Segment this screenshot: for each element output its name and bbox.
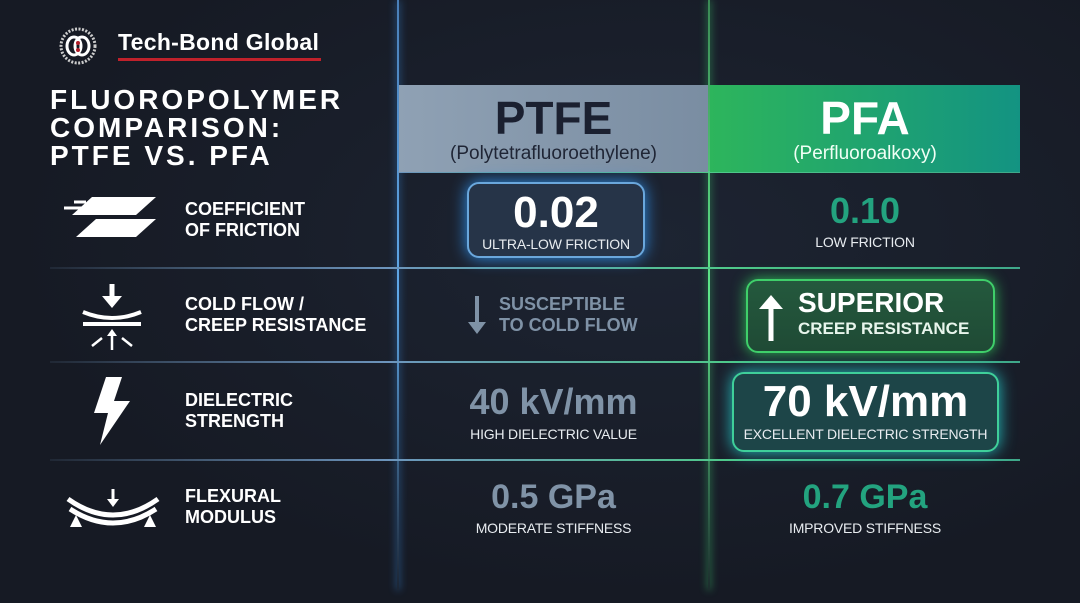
PTFE dielectric: HIGH DIELECTRIC VALUE [470,426,637,442]
row3 label: DIELECTRIC [185,390,293,410]
PFA creep box [746,279,995,353]
PFA flexural: IMPROVED STIFFNESS [789,520,941,536]
horizontal lines [50,267,1020,269]
row2 label: COLD FLOW / [185,294,304,314]
row3 label: STRENGTH [185,411,284,431]
row1 label: COEFFICIENT [185,199,305,219]
PTFE creep: TO COLD FLOW [499,315,638,335]
row2 label: CREEP RESISTANCE [185,315,366,335]
row3 label [185,390,293,431]
PTFE creep: SUSCEPTIBLE [499,294,625,314]
PTFE flexural: MODERATE STIFFNESS [476,520,631,536]
row4 icon: flexural [66,489,160,527]
PFA creep box: CREEP RESISTANCE [798,319,969,338]
PFA flexural [789,478,941,536]
header PFA: (Perfluoroalkoxy) [793,143,937,164]
PFA friction [815,190,915,250]
vertical line blue [397,0,399,590]
PFA friction: 0.10 [830,190,900,231]
row1 label [185,199,305,240]
header PTFE: (Polytetrafluoroethylene) [450,143,657,164]
header PTFE [399,85,708,172]
PFA dielectric box [732,372,999,452]
brand name: Tech-Bond Global [118,29,319,55]
PTFE friction box [467,182,645,258]
row3 icon: lightning [94,377,130,445]
title: COMPARISON: [50,112,283,143]
PFA dielectric box: 70 kV/mm [763,377,968,426]
title [50,84,343,171]
title: FLUOROPOLYMER [50,84,343,115]
row4 label: FLEXURAL [185,486,281,506]
PTFE friction box: 0.02 [513,188,599,237]
row2 label [185,294,366,335]
PFA creep box: SUPERIOR [798,287,944,318]
PFA flexural: 0.7 GPa [803,478,927,516]
PTFE dielectric: 40 kV/mm [469,381,638,422]
vertical line green [708,0,710,590]
PTFE dielectric [469,381,638,442]
row1 label: OF FRICTION [185,220,300,240]
row4 label: MODULUS [185,507,276,527]
header PTFE: PTFE [495,92,612,144]
row2 icon: creep [82,284,142,350]
PTFE flexural: 0.5 GPa [491,478,616,516]
title: PTFE VS. PFA [50,140,273,171]
header PFA: PFA [820,92,910,144]
PTFE friction box: ULTRA-LOW FRICTION [482,236,630,252]
PFA dielectric box: EXCELLENT DIELECTRIC STRENGTH [744,426,987,442]
PFA friction: LOW FRICTION [815,234,915,250]
header PFA [710,85,1020,172]
row4 label [185,486,281,527]
row1 icon: friction [64,197,156,237]
PTFE creep [468,294,638,335]
logo [60,28,96,64]
PTFE flexural [476,478,631,536]
